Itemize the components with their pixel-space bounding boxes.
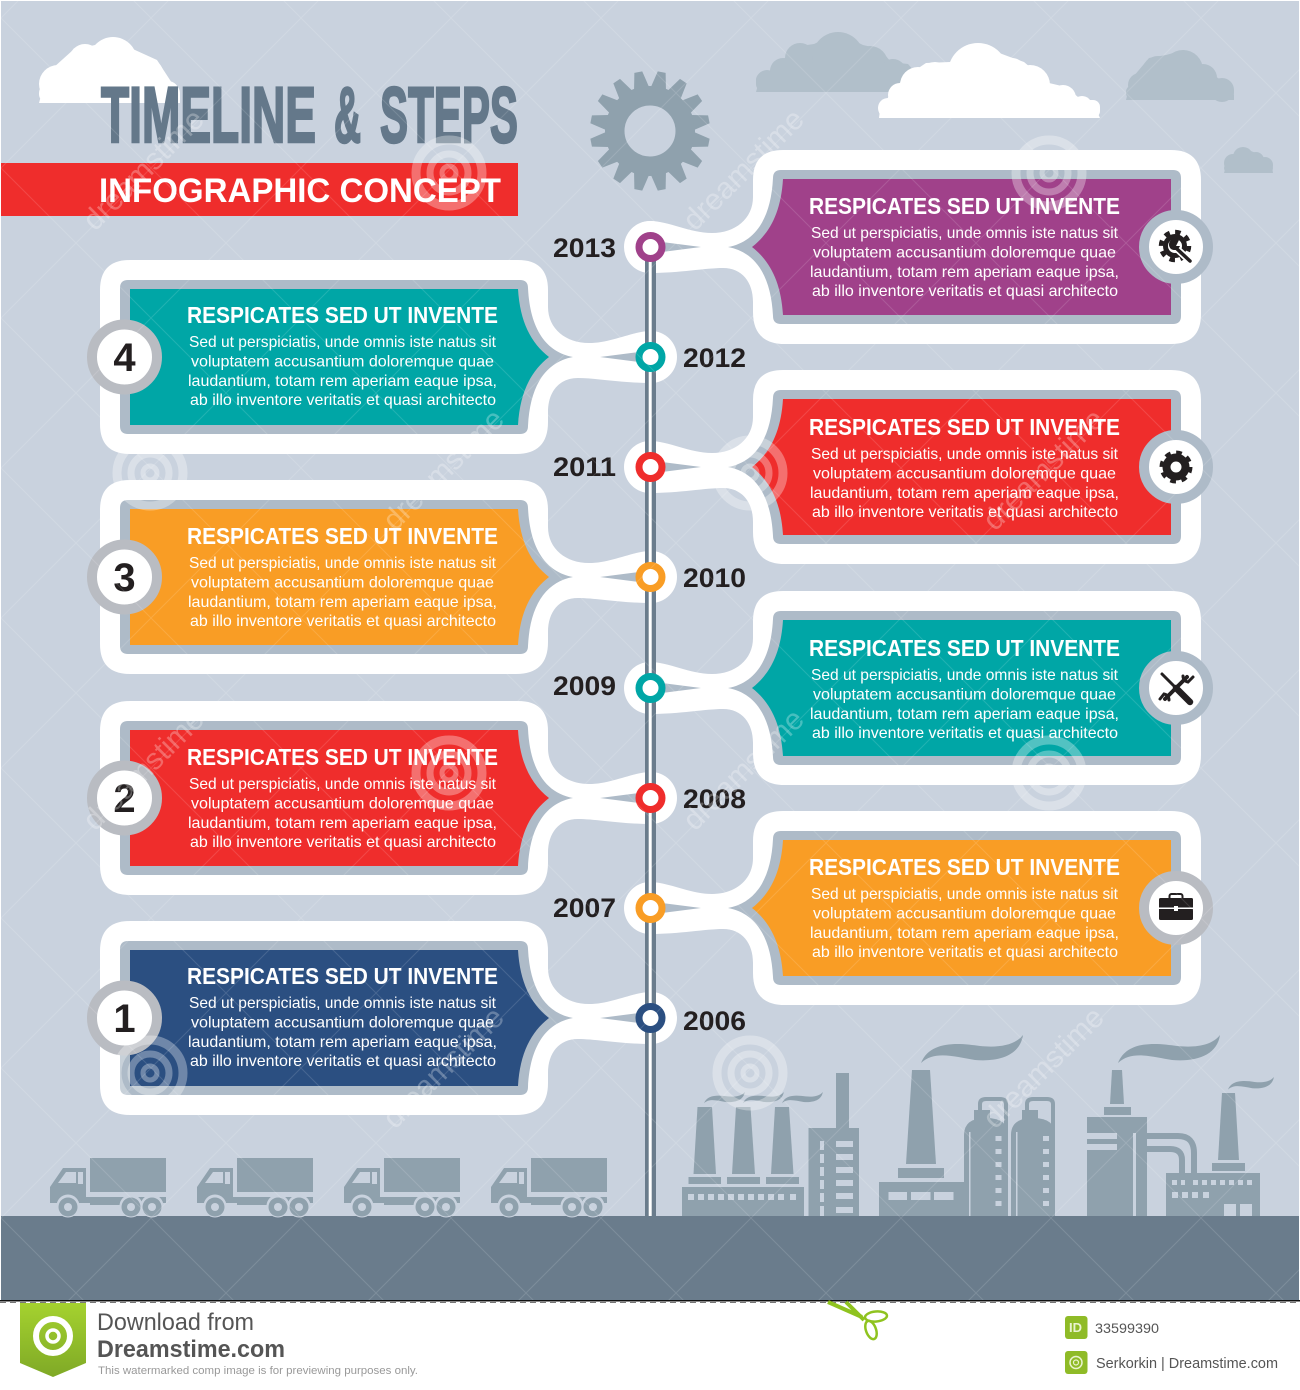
text block: 2009: laudantium, totam rem aperiam eaque ipsa, bbox=[810, 706, 1119, 723]
watermarks: dreamstime bbox=[977, 1001, 1111, 1135]
text block: 2007 bbox=[809, 854, 1120, 961]
card shape bbox=[624, 811, 1201, 1005]
text block: 2007: RESPICATES SED UT INVENTE bbox=[809, 854, 1120, 880]
watermarks: dreamstime bbox=[77, 103, 211, 237]
text block: 2007: Sed ut perspiciatis, unde omnis iste natus sit bbox=[811, 886, 1119, 903]
year labels: 2013 bbox=[553, 233, 616, 263]
card shape bbox=[624, 150, 1201, 344]
text block: 2008: laudantium, totam rem aperiam eaque ipsa, bbox=[188, 815, 497, 832]
text block: 2009: voluptatem accusantium doloremque quae bbox=[813, 686, 1116, 703]
text block: 2009: Sed ut perspiciatis, unde omnis iste natus sit bbox=[811, 667, 1119, 684]
text block: 2006: voluptatem accusantium doloremque quae bbox=[191, 1014, 494, 1031]
year labels: 2007 bbox=[553, 893, 616, 923]
panel: 2013 card bbox=[624, 150, 1201, 344]
icon: gear bbox=[1144, 435, 1208, 499]
watermarks: dreamstime bbox=[77, 703, 211, 837]
text block: 2006 bbox=[187, 963, 498, 1070]
text block: 2011: ab illo inventore veritatis et quasi architecto bbox=[812, 504, 1118, 521]
subtitle banner bbox=[1, 163, 518, 216]
text block: 2010: ab illo inventore veritatis et quasi architecto bbox=[190, 613, 496, 630]
tag bbox=[130, 509, 549, 645]
year labels bbox=[553, 233, 746, 1036]
text block: 2008: ab illo inventore veritatis et quasi architecto bbox=[190, 834, 496, 851]
panel: 2012 card bbox=[100, 260, 677, 454]
cloud: grey large bbox=[756, 32, 915, 92]
text block: 2011 bbox=[809, 414, 1120, 521]
text block: 2010 bbox=[187, 523, 498, 630]
text block: 2007: voluptatem accusantium doloremque quae bbox=[813, 905, 1116, 922]
text block: 2007: laudantium, totam rem aperiam eaque ipsa, bbox=[810, 925, 1119, 942]
watermarks: dreamstime bbox=[377, 403, 511, 537]
card shape bbox=[100, 260, 677, 454]
text block: 2011: RESPICATES SED UT INVENTE bbox=[809, 414, 1120, 440]
text block: 2012: ab illo inventore veritatis et quasi architecto bbox=[190, 392, 496, 409]
year labels: 2012 bbox=[683, 343, 746, 373]
text block: 2010: voluptatem accusantium doloremque quae bbox=[191, 574, 494, 591]
panel: 2008 card bbox=[100, 701, 677, 895]
text block: 2008: Sed ut perspiciatis, unde omnis iste natus sit bbox=[189, 776, 497, 793]
text block: 2010: laudantium, totam rem aperiam eaque ipsa, bbox=[188, 594, 497, 611]
text block: 2013: voluptatem accusantium doloremque quae bbox=[813, 244, 1116, 261]
watermarks: dreamstime bbox=[377, 1001, 511, 1135]
tag bbox=[752, 399, 1171, 535]
text block: 2012 bbox=[187, 302, 498, 409]
badge: number 2: 2 bbox=[113, 777, 136, 821]
footer: download text: Dreamstime.com bbox=[97, 1336, 285, 1363]
badge: number 4: 4 bbox=[113, 336, 136, 380]
footer: author credit: Serkorkin | Dreamstime.com bbox=[1096, 1356, 1278, 1372]
badge: number 3: 3 bbox=[113, 556, 136, 600]
badge: number 1: 1 bbox=[113, 997, 136, 1041]
footer: download text bbox=[97, 1309, 418, 1377]
tag bbox=[130, 730, 549, 866]
watermarks: dreamstime bbox=[677, 103, 811, 237]
text block: 2012: Sed ut perspiciatis, unde omnis iste natus sit bbox=[189, 334, 497, 351]
panel: 2011 card bbox=[624, 370, 1201, 564]
badge: number 4 bbox=[92, 324, 157, 390]
card shape bbox=[100, 480, 677, 674]
icon: gear with wrench bbox=[1144, 215, 1208, 279]
year labels: 2008 bbox=[683, 784, 746, 814]
title: & bbox=[334, 70, 361, 159]
year labels: 2010 bbox=[683, 563, 746, 593]
text block: 2009 bbox=[809, 635, 1120, 742]
panel: 2007 card bbox=[624, 811, 1201, 1005]
footer: image id: 33599390 bbox=[1095, 1320, 1159, 1336]
title: TIMELINE bbox=[101, 70, 316, 159]
text block: 2013: laudantium, totam rem aperiam eaque ipsa, bbox=[810, 264, 1119, 281]
cloud: top left white bbox=[39, 37, 180, 103]
watermarks: dreamstime bbox=[677, 703, 811, 837]
badge: number 3 bbox=[92, 544, 157, 610]
text block: 2013: Sed ut perspiciatis, unde omnis iste natus sit bbox=[811, 225, 1119, 242]
card shape bbox=[100, 921, 677, 1115]
icon: scissors bbox=[828, 1302, 887, 1341]
footer: download text: This watermarked comp image is for previewing purposes only. bbox=[98, 1365, 418, 1377]
text block: 2008 bbox=[187, 744, 498, 851]
footer: download text: Download from bbox=[97, 1309, 254, 1336]
title: STEPS bbox=[380, 70, 518, 159]
cloud: grey small bbox=[1224, 147, 1273, 173]
panel: 2010 card bbox=[100, 480, 677, 674]
text block: 2011: voluptatem accusantium doloremque quae bbox=[813, 465, 1116, 482]
text block: 2006: laudantium, totam rem aperiam eaque ipsa, bbox=[188, 1034, 497, 1051]
cloud: grey right bbox=[1126, 50, 1234, 102]
text block: 2010: Sed ut perspiciatis, unde omnis iste natus sit bbox=[189, 555, 497, 572]
timeline line bbox=[645, 247, 656, 1216]
panel: 2006 card bbox=[100, 921, 677, 1115]
watermarks: dreamstime bbox=[977, 403, 1111, 537]
text block: 2010: RESPICATES SED UT INVENTE bbox=[187, 523, 498, 549]
subtitle banner: INFOGRAPHIC CONCEPT bbox=[99, 172, 501, 210]
icon: large gear bbox=[590, 71, 710, 191]
icon: briefcase bbox=[1144, 876, 1208, 940]
text block: 2008: RESPICATES SED UT INVENTE bbox=[187, 744, 498, 770]
panel: 2009 card bbox=[624, 591, 1201, 785]
card shape bbox=[624, 370, 1201, 564]
card shape bbox=[100, 701, 677, 895]
year labels: 2006 bbox=[683, 1006, 746, 1036]
tag bbox=[130, 950, 549, 1086]
text block: 2009: RESPICATES SED UT INVENTE bbox=[809, 635, 1120, 661]
tag bbox=[130, 289, 549, 425]
text block: 2006: ab illo inventore veritatis et quasi architecto bbox=[190, 1053, 496, 1070]
tag bbox=[752, 620, 1171, 756]
text block: 2013: ab illo inventore veritatis et quasi architecto bbox=[812, 283, 1118, 300]
icon: crossed wrench and screwdriver bbox=[1144, 656, 1208, 720]
footer: logo ribbon bbox=[20, 1303, 86, 1377]
footer: image id: ID bbox=[1069, 1320, 1082, 1335]
text block: 2011: laudantium, totam rem aperiam eaque ipsa, bbox=[810, 485, 1119, 502]
timeline nodes bbox=[639, 236, 662, 1030]
text block: 2012: laudantium, totam rem aperiam eaque ipsa, bbox=[188, 373, 497, 390]
factory windows bbox=[688, 1132, 1252, 1216]
card shape bbox=[624, 591, 1201, 785]
text block: 2011: Sed ut perspiciatis, unde omnis iste natus sit bbox=[811, 446, 1119, 463]
tag bbox=[752, 179, 1171, 315]
factories bbox=[682, 1035, 1274, 1216]
year labels: 2009 bbox=[553, 671, 616, 701]
text block: 2007: ab illo inventore veritatis et quasi architecto bbox=[812, 944, 1118, 961]
footer: image id bbox=[1065, 1316, 1159, 1339]
text block: 2006: RESPICATES SED UT INVENTE bbox=[187, 963, 498, 989]
text block: 2009: ab illo inventore veritatis et quasi architecto bbox=[812, 725, 1118, 742]
text block: 2013: RESPICATES SED UT INVENTE bbox=[809, 193, 1120, 219]
footer cut line bbox=[0, 1300, 1300, 1302]
ground bbox=[1, 1216, 1299, 1300]
text block: 2012: voluptatem accusantium doloremque quae bbox=[191, 353, 494, 370]
cloud: white large bbox=[878, 43, 1100, 118]
footer: author credit bbox=[1065, 1351, 1278, 1374]
badge: number 2 bbox=[92, 766, 157, 830]
trucks bbox=[50, 1158, 607, 1218]
text block: 2012: RESPICATES SED UT INVENTE bbox=[187, 302, 498, 328]
text block: 2006: Sed ut perspiciatis, unde omnis iste natus sit bbox=[189, 995, 497, 1012]
text block: 2013 bbox=[809, 193, 1120, 300]
tag bbox=[752, 840, 1171, 976]
year labels: 2011 bbox=[553, 452, 616, 482]
badge: number 1 bbox=[92, 986, 157, 1050]
text block: 2008: voluptatem accusantium doloremque quae bbox=[191, 795, 494, 812]
